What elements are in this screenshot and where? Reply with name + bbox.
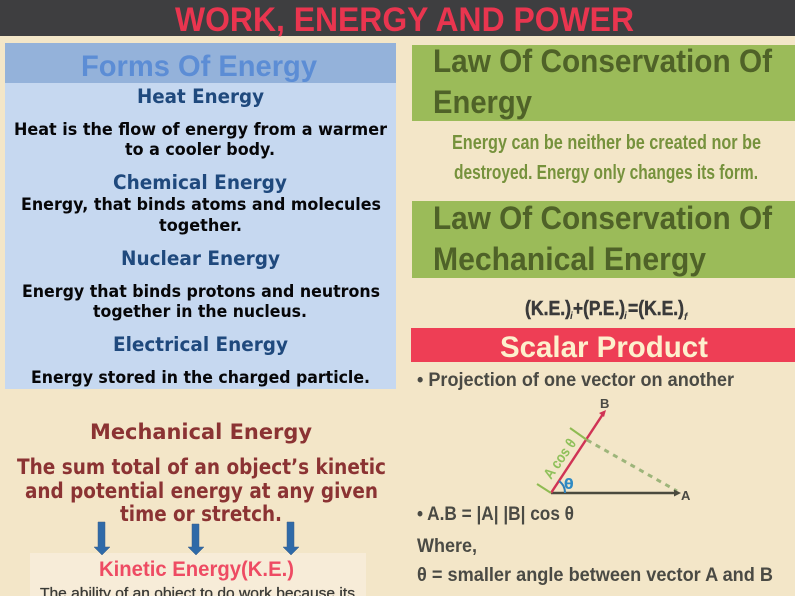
heading: law of conservation of mechanical energy: Law Of Conservation Of <box>433 200 772 236</box>
formula: +(P.E.) <box>573 298 625 320</box>
heading: law of conservation of energy: Energy <box>433 84 532 120</box>
text: nuclear energy: Energy that binds protons and neutrons <box>22 282 380 301</box>
formula: =(K.E.) <box>628 298 684 320</box>
title: WORK, ENERGY AND POWER <box>175 1 634 39</box>
label: B: B <box>600 396 609 411</box>
bullet: projection: • Projection of one vector on another <box>417 369 734 391</box>
subheading: chemical energy: Chemical Energy <box>113 171 287 194</box>
text: electrical energy: Energy stored in the charged particle. <box>31 368 370 387</box>
panel: law of conservation of energy <box>412 43 795 121</box>
text: nuclear energy <box>22 282 380 321</box>
projection markers <box>537 428 587 493</box>
diagram: vector projection <box>537 396 691 503</box>
panel heading band <box>5 43 396 83</box>
heading: kinetic energy: Kinetic Energy(K.E.) <box>99 558 294 581</box>
label: A: A <box>681 488 691 503</box>
text: mechanical energy definition: and potential energy at any given <box>25 479 378 503</box>
text: heat energy <box>14 120 388 159</box>
text: theta definition: θ = smaller angle between vector A and B <box>417 564 773 586</box>
heading: law of conservation of energy <box>433 43 772 120</box>
formula: (K.E.) <box>525 298 571 320</box>
vector B <box>551 410 606 493</box>
subheading: nuclear energy: Nuclear Energy <box>121 247 280 270</box>
angle arc <box>559 481 565 493</box>
heading: scalar product: Scalar Product <box>500 331 708 364</box>
text: heat energy: to a cooler body. <box>125 140 275 159</box>
heading: mechanical energy: Mechanical Energy <box>90 420 312 444</box>
text: chemical energy: together. <box>159 216 242 235</box>
formula: dot product: • A.B = |A| |B| cos θ <box>417 503 574 525</box>
heading: forms of energy: Forms Of Energy <box>81 50 317 83</box>
heading: law of conservation of mechanical energy: Mechanical Energy <box>433 241 706 277</box>
text: where: Where, <box>417 535 477 557</box>
arrow: down 1 <box>94 522 110 555</box>
text: mechanical energy definition <box>17 455 386 526</box>
projection dashed line <box>587 440 677 491</box>
text: chemical energy: Energy, that binds atoms and molecules <box>21 195 381 214</box>
text: conservation of energy <box>452 132 761 184</box>
panel: law of conservation of mechanical energy <box>412 200 795 278</box>
heading: law of conservation of energy: Law Of Conservation Of <box>433 43 772 79</box>
text: mechanical energy definition: time or stretch. <box>120 502 282 526</box>
text: nuclear energy: together in the nucleus. <box>93 302 307 321</box>
arrow: down 2 <box>188 524 204 555</box>
label: A cos theta: A cos θ <box>540 436 580 482</box>
subheading: heat energy: Heat Energy <box>137 85 264 108</box>
panel: forms of energy <box>5 43 396 389</box>
text: chemical energy <box>21 195 381 235</box>
header bar <box>0 0 795 39</box>
formula: i <box>624 311 627 322</box>
subheading: electrical energy: Electrical Energy <box>113 333 288 356</box>
vector A <box>551 490 681 496</box>
formula <box>525 298 689 323</box>
heading: law of conservation of mechanical energy <box>433 200 772 277</box>
arrow: down 3 <box>283 522 299 555</box>
panel: kinetic energy <box>30 553 366 596</box>
text: mechanical energy definition: The sum total of an object’s kinetic <box>17 455 386 479</box>
formula: f <box>684 312 689 323</box>
label: theta: θ <box>564 477 574 493</box>
formula: i <box>570 311 573 322</box>
text: heat energy: Heat is the flow of energy from a warmer <box>14 120 388 139</box>
banner: scalar product <box>411 328 795 364</box>
